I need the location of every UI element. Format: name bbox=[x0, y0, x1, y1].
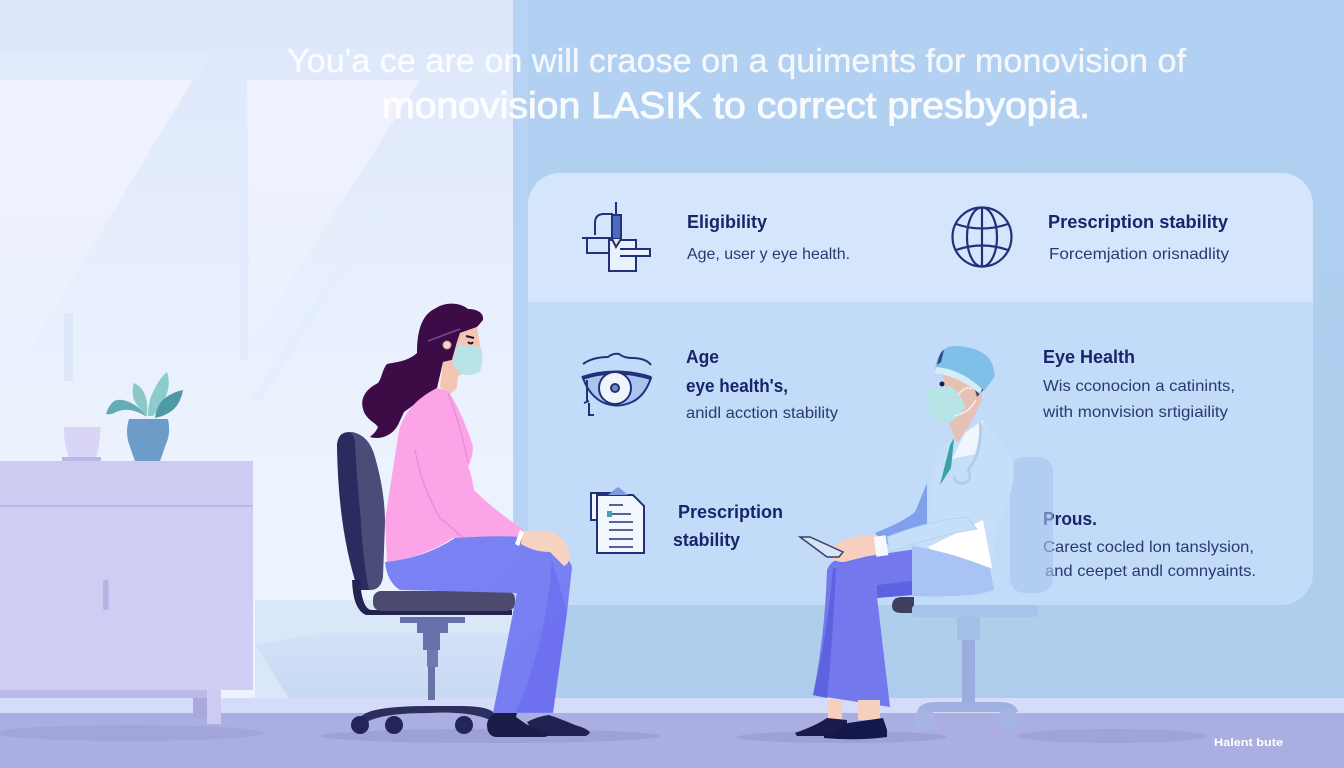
item: prescription stability: Forcemjation orisnadlity bbox=[1049, 246, 1229, 263]
item: eligibility: Eligibility bbox=[687, 212, 767, 232]
item: prous: and ceepet andl comnyaints. bbox=[1045, 563, 1256, 580]
item: prous: Carest cocled lon tanslysion, bbox=[1043, 539, 1254, 556]
lab coat back bbox=[912, 420, 1014, 597]
icon: eye bbox=[582, 354, 651, 415]
cabinet bbox=[0, 461, 253, 724]
footer label: Halent bute bbox=[1214, 737, 1283, 749]
hair bbox=[362, 304, 483, 438]
title bbox=[287, 42, 1187, 126]
phone bbox=[800, 537, 843, 557]
cup on saucer bbox=[62, 427, 101, 461]
office chair bbox=[337, 432, 515, 734]
neck and face bbox=[942, 365, 982, 443]
panel: information card bbox=[528, 173, 1313, 605]
stethoscope bbox=[954, 422, 980, 483]
item: prescription: Prescription bbox=[678, 502, 783, 522]
item: prous bbox=[1043, 509, 1256, 580]
doctor bbox=[795, 346, 1053, 739]
white shirt bbox=[928, 520, 992, 568]
trousers bbox=[813, 548, 923, 707]
item: eye health: Wis cconocion a catinints, bbox=[1043, 378, 1235, 395]
item: prescription: stability bbox=[673, 530, 740, 550]
ankles bbox=[828, 700, 880, 720]
item: prescription bbox=[591, 487, 783, 553]
shoes bbox=[527, 715, 590, 736]
title: You'a ce are on will craose on a quiments for monovision of bbox=[287, 42, 1187, 79]
icon: globe bbox=[952, 208, 1012, 266]
icon: tools and pencil bbox=[582, 202, 650, 271]
hand bbox=[521, 531, 569, 566]
shirt and tie bbox=[952, 420, 983, 459]
item: age: anidl acction stability bbox=[686, 405, 838, 422]
plant in vase bbox=[106, 372, 183, 461]
item: eye health bbox=[1042, 347, 1235, 421]
item: age: Age bbox=[686, 347, 719, 367]
surgical cap bbox=[935, 346, 995, 390]
item: eye health: with monvision srtigiaility bbox=[1042, 404, 1228, 421]
item: age bbox=[582, 347, 838, 422]
item: age: eye health's, bbox=[686, 376, 788, 396]
item: eligibility bbox=[582, 202, 850, 271]
hand bbox=[830, 536, 880, 562]
item: prous: Prous. bbox=[1043, 509, 1097, 529]
inner sleeve bbox=[875, 483, 927, 545]
face mask bbox=[453, 344, 482, 375]
title: monovision LASIK to correct presbyopia. bbox=[382, 85, 1090, 126]
shoes bbox=[795, 718, 847, 736]
skin face and neck bbox=[440, 327, 481, 396]
item: eye health: Eye Health bbox=[1043, 347, 1135, 367]
item: prescription stability bbox=[952, 208, 1229, 266]
item: prescription stability: Prescription stability bbox=[1048, 212, 1228, 232]
coat skirt bbox=[912, 546, 994, 596]
trousers bbox=[385, 536, 572, 713]
item: eligibility: Age, user y eye health. bbox=[687, 246, 850, 263]
icon: clipboard document bbox=[591, 487, 644, 553]
hair bbox=[972, 377, 986, 397]
translucent chair bbox=[892, 457, 1053, 731]
arm sleeve bbox=[887, 517, 977, 552]
sweater bbox=[385, 388, 524, 562]
mask bbox=[928, 386, 965, 422]
woman patient bbox=[337, 304, 590, 737]
